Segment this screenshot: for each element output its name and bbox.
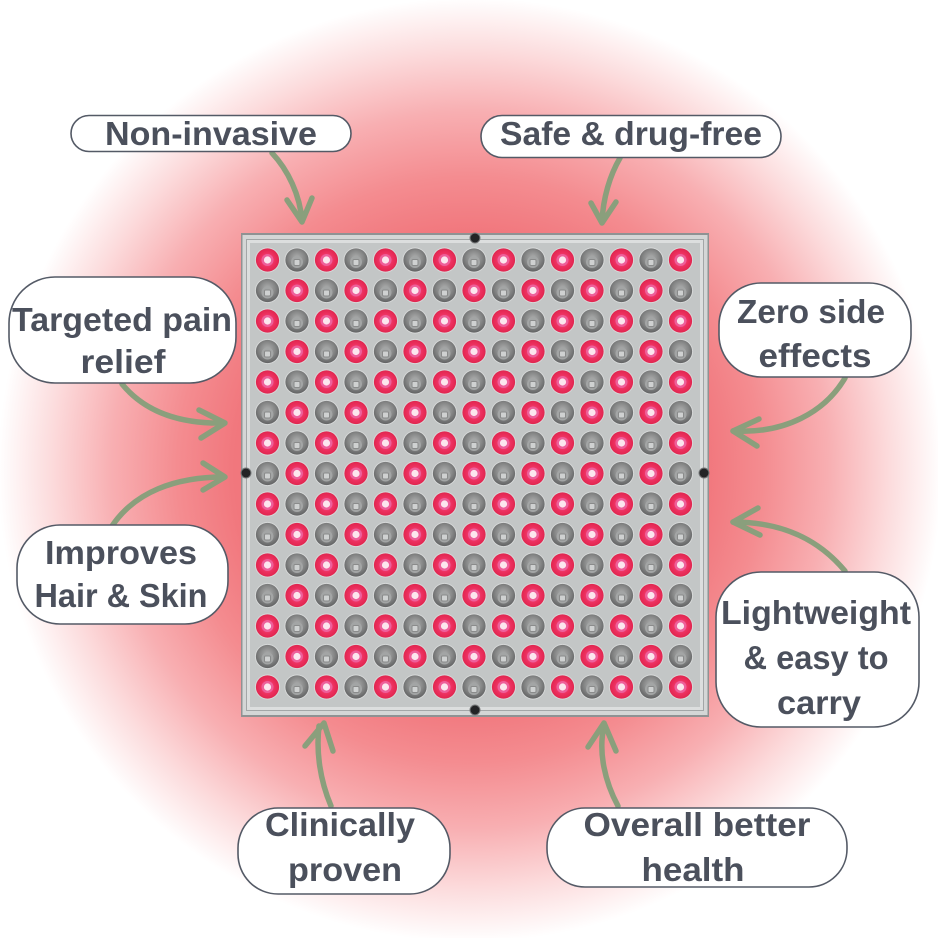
label: improves hair and skin (17, 525, 228, 624)
arrow: improves hair and skin (112, 463, 225, 526)
label: improves hair and skin: Hair & Skin (34, 577, 208, 614)
label: targeted pain relief: Targeted pain (12, 301, 232, 338)
label: improves hair and skin: Improves (45, 534, 197, 571)
panel frame (241, 233, 709, 717)
label: clinically proven: proven (288, 851, 402, 888)
label: non-invasive: Non-invasive (105, 115, 317, 152)
label: lightweight and easy to carry (716, 572, 919, 727)
LED panel (241, 233, 709, 717)
label: zero side effects: effects (758, 337, 872, 374)
arrow: overall better health (588, 723, 618, 806)
label: zero side effects (719, 283, 911, 377)
arrow: zero side effects (733, 378, 845, 446)
arrow: non-invasive (272, 153, 312, 222)
label: clinically proven (238, 806, 450, 894)
label: overall better health (547, 806, 847, 888)
arrow: clinically proven (305, 723, 333, 806)
LED grid (253, 245, 696, 703)
label: targeted pain relief (9, 277, 236, 383)
label: safe and drug-free: Safe & drug-free (500, 115, 762, 152)
arrow: targeted pain relief (122, 384, 225, 438)
label: targeted pain relief: relief (80, 343, 167, 380)
label: overall better health: Overall better (584, 806, 811, 843)
label: lightweight and easy to carry: Lightweight (721, 594, 911, 631)
arrow: lightweight (733, 508, 845, 571)
arrow: safe and drug-free (591, 158, 620, 223)
label: clinically proven: Clinically (265, 806, 416, 843)
label: lightweight and easy to carry: carry (777, 684, 862, 721)
label: overall better health: health (642, 851, 744, 888)
label: lightweight and easy to carry: & easy to (744, 639, 888, 676)
label: zero side effects: Zero side (737, 293, 885, 330)
screws (241, 233, 709, 715)
